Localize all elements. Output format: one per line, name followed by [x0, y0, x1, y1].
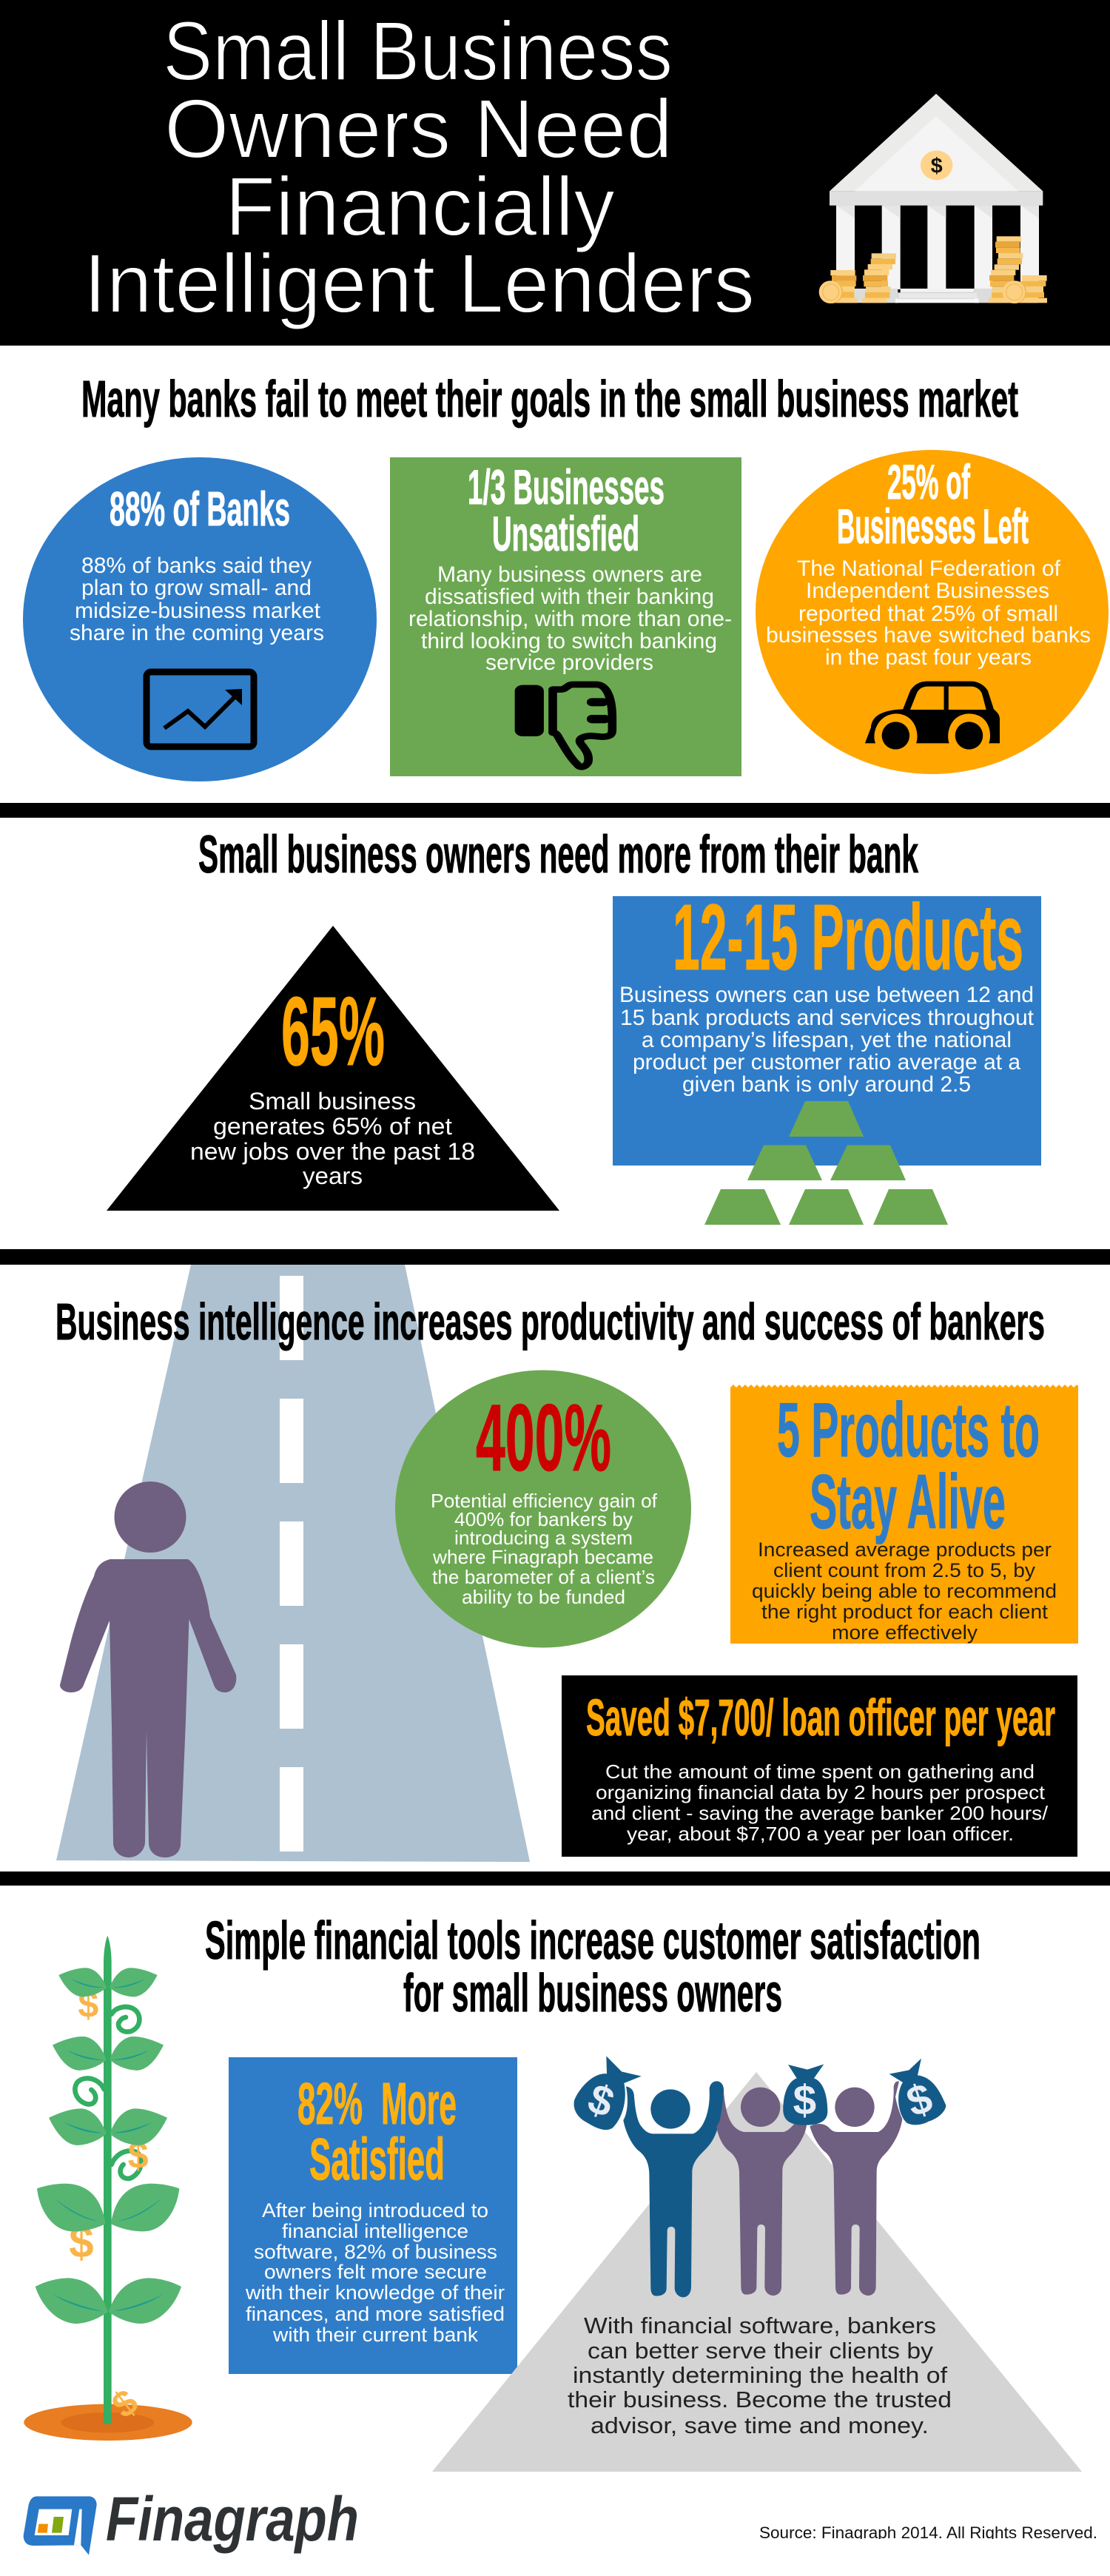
panel heading: Unsatisfied [492, 506, 639, 561]
heading: section 4: for small business owners [403, 1964, 782, 2023]
icon: bank with coins [819, 94, 1047, 303]
icons: money bags [574, 2056, 946, 2130]
header banner [0, 0, 1110, 346]
panel text: generates 65% of net [213, 1113, 452, 1140]
title: Small Business [163, 4, 673, 98]
panel text: Cut the amount of time spent on gathering and [605, 1761, 1035, 1783]
panel text: instantly determining the health of [573, 2362, 947, 2388]
panel text [431, 1490, 658, 1608]
title: Owners Need [164, 82, 673, 175]
panel text: 400% for bankers by [454, 1508, 633, 1530]
panel: 400% efficiency [395, 1371, 691, 1647]
logo: Finagraph [24, 2484, 359, 2555]
heading: section 4 [205, 1911, 980, 2023]
panel text: relationship, with more than one- [408, 607, 732, 631]
illustration: person [60, 1482, 236, 1857]
panel text: Business owners can use between 12 and [619, 983, 1034, 1007]
panel text: ability to be funded [462, 1586, 625, 1608]
panel heading [468, 460, 665, 561]
panel text: third looking to switch banking [421, 629, 717, 653]
panel: 1/3 businesses unsatisfied [390, 457, 741, 776]
panel text [619, 983, 1035, 1097]
panel text: a company’s lifespan, yet the national [642, 1028, 1012, 1052]
panel text: more effectively [832, 1621, 978, 1644]
title: Intelligent Lenders [84, 237, 755, 330]
panel heading: Satisfied [309, 2126, 445, 2192]
illustration: people holding money bags: $ [582, 2075, 620, 2127]
big number: 400% [476, 1385, 611, 1491]
panel text: finances, and more satisfied [246, 2303, 505, 2325]
panel text: the right product for each client [761, 1601, 1049, 1623]
panel text: software, 82% of business [254, 2241, 497, 2263]
illustration: people holding money bags: $ [793, 2078, 816, 2125]
panel: 25% of businesses left [756, 450, 1109, 774]
panel text: Potential efficiency gain of [431, 1490, 658, 1512]
panel text: financial intelligence [282, 2220, 468, 2242]
panel text: Small business [249, 1088, 416, 1114]
panel text: their business. Become the trusted [568, 2387, 952, 2412]
panel text: introducing a system [454, 1527, 633, 1549]
panel: 65% triangle [107, 926, 559, 1211]
panel heading [777, 1388, 1040, 1545]
panel: saved $7,700 [562, 1675, 1077, 1857]
panel text: With financial software, bankers [584, 2313, 936, 2338]
panel text: advisor, save time and money. [591, 2412, 929, 2438]
illustration: money plant: $ [78, 1984, 98, 2025]
panel text: After being introduced to [262, 2199, 488, 2222]
panel text: plan to grow small- and [81, 576, 312, 600]
panel heading: 1/3 Businesses [468, 460, 665, 514]
panel text: 15 bank products and services throughout [620, 1006, 1035, 1030]
panel text: product per customer ratio average at a [633, 1050, 1020, 1075]
illustration: money plant: $ [128, 2135, 149, 2176]
panel text: year, about $7,700 a year per loan officer. [627, 1823, 1014, 1845]
panel text: reported that 25% of small [798, 602, 1058, 626]
illustration: money plant: $ [69, 2218, 94, 2267]
panel text [190, 1088, 475, 1189]
icon: stacked bars [704, 1101, 948, 1225]
panel text: the barometer of a client’s [432, 1566, 655, 1588]
panel text [408, 562, 732, 675]
panel text: share in the coming years [70, 621, 324, 645]
panel text: given bank is only around 2.5 [682, 1072, 971, 1097]
icon: logo mark [24, 2496, 97, 2555]
panel text: and client - saving the average banker 200 hours/ [591, 1802, 1049, 1824]
panel text: Increased average products per [758, 1538, 1052, 1561]
wordmark: Finagraph [106, 2484, 359, 2554]
panel text: owners felt more secure [264, 2261, 487, 2283]
icon: bank with coins: $ [931, 154, 943, 178]
panel heading [297, 2071, 457, 2192]
panel text: with their knowledge of their [245, 2281, 505, 2304]
panel: 5 products to stay alive [730, 1385, 1078, 1644]
panel text: with their current bank [272, 2324, 479, 2346]
panel text [591, 1761, 1049, 1845]
illustration: road [56, 1265, 530, 1862]
figures: purple [716, 2081, 902, 2296]
panel text [245, 2199, 505, 2346]
icon: thumbs down [515, 685, 612, 767]
panel text: businesses have switched banks [766, 623, 1091, 648]
panel text [752, 1538, 1057, 1644]
panel: 12-15 products [613, 885, 1041, 1225]
panel text: client count from 2.5 to 5, by [773, 1559, 1036, 1581]
panel text: The National Federation of [797, 556, 1061, 581]
panel: 82% more satisfied [229, 2057, 517, 2374]
title [84, 4, 755, 330]
big number: 65% [281, 977, 385, 1086]
panel text: new jobs over the past 18 [190, 1138, 475, 1165]
panel text: can better serve their clients by [588, 2338, 934, 2364]
illustration: people holding money bags: $ [901, 2075, 938, 2126]
source note: Source: Finagraph 2014. All Rights Reserved. [759, 2523, 1097, 2542]
illustration: money plant [24, 1936, 192, 2441]
title: Financially [225, 160, 615, 253]
panel heading: More [381, 2071, 457, 2136]
panel text: dissatisfied with their banking [425, 585, 714, 609]
panel heading: 88% of Banks [110, 482, 290, 536]
panel text: in the past four years [825, 645, 1032, 670]
panel: financial software triangle [432, 2056, 1082, 2472]
panel text [70, 554, 324, 645]
panel heading [837, 454, 1029, 554]
figure: blue [623, 2081, 724, 2297]
panel text: midsize-business market [75, 599, 321, 623]
panel text: Many business owners are [437, 562, 702, 587]
panel text: service providers [485, 650, 653, 675]
panel heading: 82% [297, 2071, 363, 2136]
illustration: people holding money bags [574, 2056, 946, 2297]
panel text [568, 2313, 952, 2438]
panel heading: 25% of [887, 454, 971, 509]
panel text [766, 556, 1091, 670]
panel text: quickly being able to recommend [752, 1580, 1057, 1602]
panel text: Independent Businesses [806, 579, 1049, 603]
icon: car [865, 682, 1000, 750]
panel text: organizing financial data by 2 hours per prospect [596, 1781, 1046, 1803]
panel text: 88% of banks said they [81, 554, 312, 578]
panel text: where Finagraph became [432, 1546, 653, 1568]
pot base [24, 2404, 192, 2441]
panel: 88% of banks [23, 457, 377, 781]
panel text: years [303, 1163, 363, 1189]
illustration: money plant: $ [104, 2381, 146, 2427]
icon: line chart [147, 672, 254, 747]
